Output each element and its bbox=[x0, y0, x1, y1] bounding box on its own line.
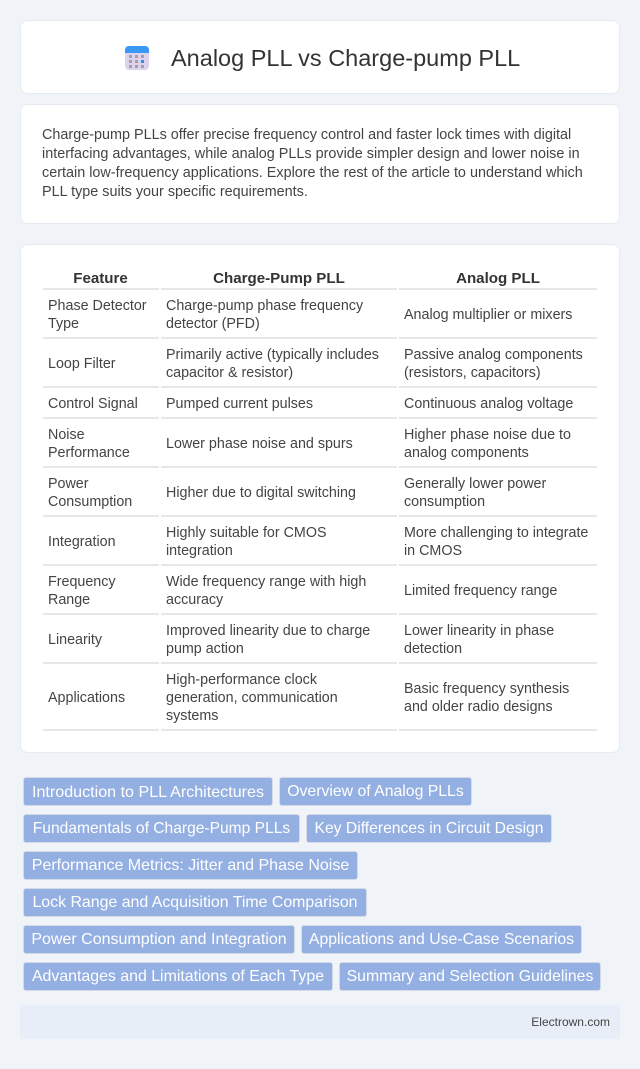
comparison table: analog components bbox=[404, 445, 529, 461]
comparison table: Highly suitable for CMOS bbox=[166, 525, 326, 541]
comparison table: Primarily active (typically includes bbox=[166, 347, 379, 363]
topic tags: Applications and Use-Case Scenarios bbox=[309, 931, 574, 948]
comparison table: High-performance clock bbox=[166, 672, 317, 688]
comparison table: More challenging to integrate bbox=[404, 525, 588, 541]
comparison table: Linearity bbox=[48, 632, 102, 648]
comparison table: Passive analog components bbox=[404, 347, 583, 363]
comparison table: Loop Filter bbox=[48, 356, 116, 372]
comparison table: Consumption bbox=[48, 494, 132, 510]
intro text: PLL type suits your specific requirements. bbox=[42, 184, 308, 200]
topic tags: Performance Metrics: Jitter and Phase Noise bbox=[32, 857, 349, 874]
comparison table: Feature bbox=[73, 270, 128, 287]
comparison table: Wide frequency range with high bbox=[166, 574, 366, 590]
comparison table: Analog multiplier or mixers bbox=[404, 307, 572, 323]
comparison table: Improved linearity due to charge bbox=[166, 623, 370, 639]
intro text bbox=[42, 127, 583, 200]
comparison table: and older radio designs bbox=[404, 699, 553, 715]
comparison table: consumption bbox=[404, 494, 485, 510]
comparison table: Limited frequency range bbox=[404, 583, 557, 599]
comparison table: Control Signal bbox=[48, 396, 138, 412]
topic tags: Summary and Selection Guidelines bbox=[347, 968, 593, 985]
header card bbox=[20, 20, 620, 94]
comparison table: Noise bbox=[48, 427, 85, 443]
comparison table: Charge-Pump PLL bbox=[213, 270, 345, 287]
topic tags: Overview of Analog PLLs bbox=[287, 783, 464, 800]
comparison table bbox=[43, 270, 597, 731]
comparison table: accuracy bbox=[166, 592, 223, 608]
comparison table: Basic frequency synthesis bbox=[404, 681, 569, 697]
comparison table: Applications bbox=[48, 690, 125, 706]
comparison table: Type bbox=[48, 316, 79, 332]
title: Analog PLL vs Charge-pump PLL bbox=[171, 45, 520, 71]
topic tags: Lock Range and Acquisition Time Comparison bbox=[32, 894, 358, 911]
comparison table: Power bbox=[48, 476, 89, 492]
comparison table: Lower linearity in phase bbox=[404, 623, 554, 639]
footer credit: Electrown.com bbox=[531, 1015, 610, 1029]
comparison table: Higher phase noise due to bbox=[404, 427, 571, 443]
intro text: interfacing advantages, while analog PLLs provide simpler design and lower noise in bbox=[42, 146, 580, 162]
comparison table: in CMOS bbox=[404, 543, 462, 559]
topic tags: Introduction to PLL Architectures bbox=[32, 783, 264, 801]
footer bar bbox=[20, 1005, 620, 1039]
comparison table: Charge-pump phase frequency bbox=[166, 298, 363, 314]
intro panel bbox=[20, 104, 620, 224]
comparison table: Lower phase noise and spurs bbox=[166, 436, 353, 452]
comparison table: Range bbox=[48, 592, 90, 608]
intro text: certain low-frequency applications. Explore the rest of the article to understand which bbox=[42, 165, 583, 181]
intro text: Charge-pump PLLs offer precise frequency control and faster lock times with digital bbox=[42, 127, 571, 143]
comparison table: Analog PLL bbox=[456, 270, 540, 287]
comparison table: Higher due to digital switching bbox=[166, 485, 356, 501]
comparison table: capacitor & resistor) bbox=[166, 365, 293, 381]
topic tags: Advantages and Limitations of Each Type bbox=[32, 968, 324, 985]
comparison table: Continuous analog voltage bbox=[404, 396, 573, 412]
icon: calendar grid bbox=[125, 46, 149, 70]
topic tags: Key Differences in Circuit Design bbox=[314, 820, 544, 837]
comparison table: generation, communication bbox=[166, 690, 338, 706]
comparison table: Pumped current pulses bbox=[166, 396, 313, 412]
comparison table: pump action bbox=[166, 641, 244, 657]
comparison table: Phase Detector bbox=[48, 298, 147, 314]
comparison table: systems bbox=[166, 708, 218, 724]
comparison table panel bbox=[20, 244, 620, 753]
comparison table: Frequency bbox=[48, 574, 116, 590]
comparison table: Performance bbox=[48, 445, 130, 461]
comparison table: integration bbox=[166, 543, 233, 559]
comparison table: detector (PFD) bbox=[166, 316, 260, 332]
comparison table: Integration bbox=[48, 534, 116, 550]
comparison table: Generally lower power bbox=[404, 476, 546, 492]
comparison table: (resistors, capacitors) bbox=[404, 365, 541, 381]
topic tags bbox=[23, 777, 601, 991]
topic tags: Power Consumption and Integration bbox=[31, 931, 287, 948]
comparison table: detection bbox=[404, 641, 462, 657]
topic tags: Fundamentals of Charge-Pump PLLs bbox=[33, 820, 290, 837]
